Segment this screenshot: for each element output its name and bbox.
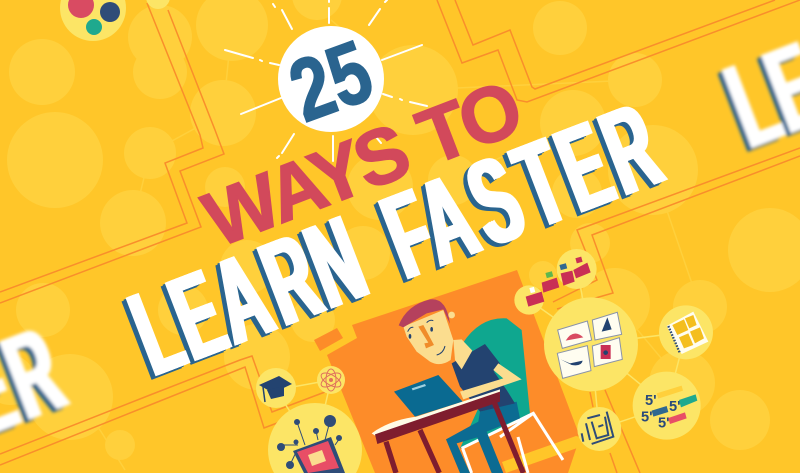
orange tab: [314, 328, 343, 351]
laptop video circle: [268, 403, 362, 473]
notebook circle: [659, 305, 713, 359]
face details: [408, 320, 445, 355]
nose: [418, 325, 434, 348]
top left gears circle: [60, 0, 126, 41]
number badge: 25: [277, 21, 384, 140]
flash cards circle: [544, 297, 638, 391]
cubes circle left: [514, 285, 544, 315]
arm: [460, 363, 522, 399]
heading: learn faster: LEARN FASTER: [108, 81, 670, 406]
laptop: [394, 375, 463, 417]
heading: learn faster: LEARN FASTER: [114, 77, 677, 401]
cubes circle right: [542, 249, 597, 293]
connector lines left: [276, 380, 331, 450]
maze circle: [577, 407, 621, 451]
orange panel behind student: [327, 270, 580, 473]
five minute chart circle: [633, 372, 701, 440]
chair back: [460, 318, 530, 448]
shirt: [452, 344, 515, 412]
heading: ways to: WAYS TO: [192, 62, 534, 264]
heading: learn faster: LEARN FASTER: [112, 78, 674, 402]
atom circle: [317, 366, 345, 394]
connector lines right: [529, 268, 686, 429]
top small circle: [146, 0, 170, 9]
heading: learn faster: LEARN FASTER: [117, 76, 679, 401]
eyes: [409, 327, 433, 339]
neck: [453, 339, 472, 369]
desk: [372, 389, 500, 437]
ear: [448, 312, 455, 318]
five minute chart circle: 5': [641, 409, 653, 425]
heading: learn faster: LEARN FASTER: [110, 79, 672, 404]
hair: [399, 299, 450, 327]
trousers: [446, 402, 520, 473]
sun rays: [225, 0, 427, 161]
yellow floor stripe: [502, 436, 583, 473]
student at laptop: [372, 299, 563, 473]
five minute chart circle: 5': [645, 393, 657, 409]
five minute chart circle: 5': [669, 399, 681, 415]
graduation cap circle: [256, 368, 296, 408]
head: [403, 310, 453, 364]
five minute chart circle: 5': [658, 416, 670, 432]
chair legs: [462, 413, 563, 473]
